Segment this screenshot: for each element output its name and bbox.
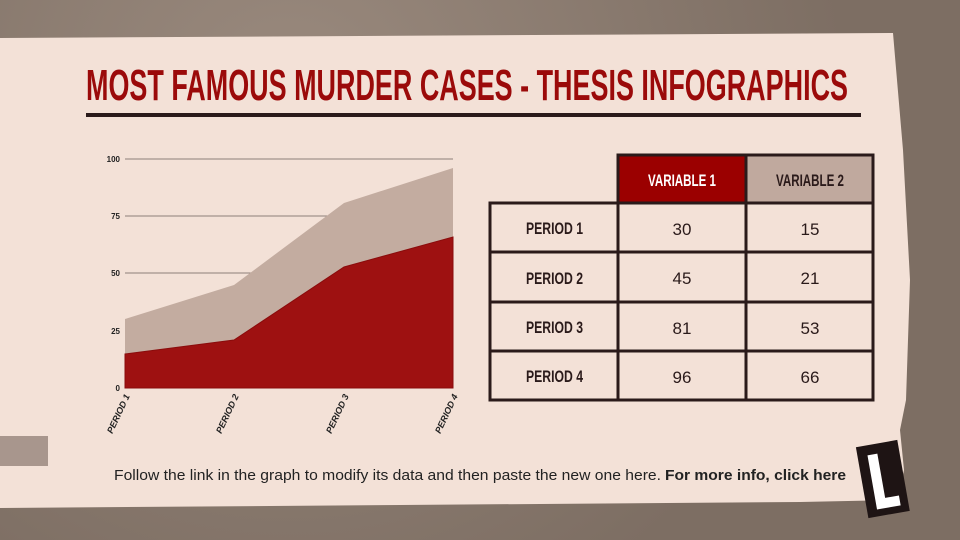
- data table: 96: [673, 368, 691, 387]
- footer text: Follow the link in the graph to modify its data and then paste the new one here.: [114, 467, 661, 484]
- data table: PERIOD 2: [526, 269, 583, 288]
- area chart: 0: [116, 384, 121, 393]
- data table: 81: [673, 319, 691, 338]
- area chart: PERIOD 3: [324, 393, 351, 435]
- area chart: PERIOD 2: [214, 393, 241, 435]
- area chart: [105, 155, 460, 435]
- data table: PERIOD 1: [526, 219, 583, 238]
- area chart: 25: [111, 327, 121, 336]
- data table: 53: [801, 319, 819, 338]
- area chart: 75: [111, 212, 121, 221]
- data table: VARIABLE 2: [776, 171, 844, 190]
- data table: VARIABLE 1: [648, 171, 716, 190]
- footer text: For more info, click here: [665, 467, 846, 484]
- area chart: PERIOD 4: [433, 393, 460, 435]
- data table: 15: [801, 220, 819, 239]
- area chart: 100: [107, 155, 121, 164]
- data table: PERIOD 4: [526, 367, 583, 386]
- data table: 66: [801, 368, 819, 387]
- data table: 21: [801, 269, 819, 288]
- area chart: 50: [111, 269, 121, 278]
- data table: 45: [673, 269, 691, 288]
- data table: 30: [673, 220, 691, 239]
- data table: PERIOD 3: [526, 318, 583, 337]
- tape: [0, 436, 48, 466]
- area chart: PERIOD 1: [105, 393, 132, 435]
- icon: L badge: [856, 440, 910, 518]
